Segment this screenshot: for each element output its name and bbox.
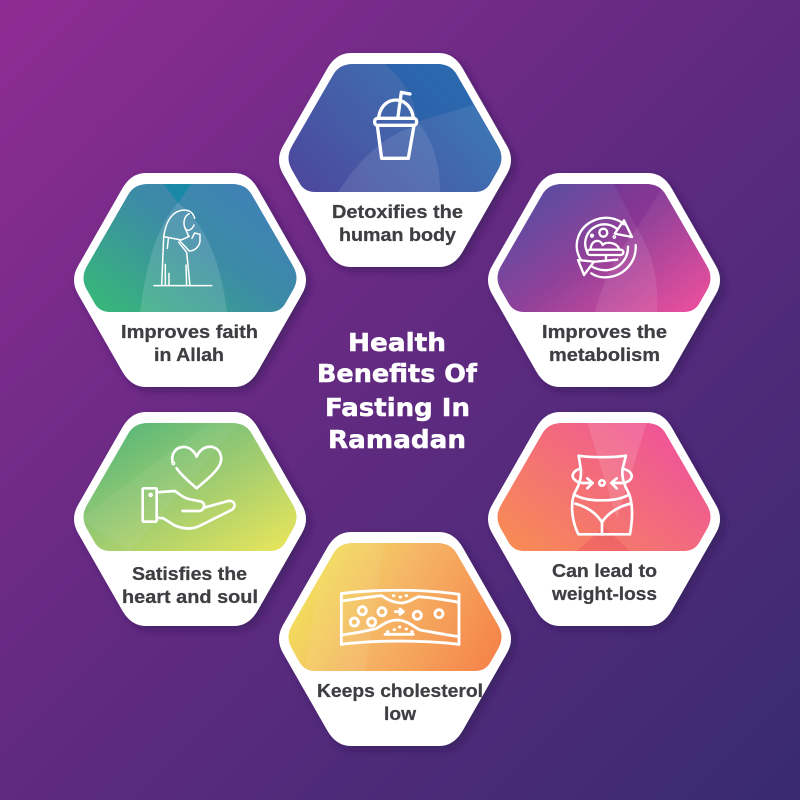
title: Ramadan: [328, 425, 466, 454]
label: metabolism: Improves the: [542, 322, 667, 342]
panel: faith: [74, 173, 306, 387]
hexagon card: metabolism: [488, 173, 720, 387]
label: detoxifies: human body: [339, 225, 456, 245]
icon: metabolism cycle: [577, 218, 636, 277]
panel: cholesterol: [279, 532, 511, 746]
panel: heart and soul: [74, 412, 306, 626]
icon: slim waist: [572, 456, 632, 534]
label: faith: in Allah: [154, 345, 224, 365]
title: Fasting In: [325, 393, 470, 422]
label: metabolism: metabolism: [549, 345, 660, 365]
icon: drink cup: [375, 92, 417, 158]
panel: metabolism: [488, 173, 720, 387]
icon: praying woman: [154, 210, 212, 286]
hexagon card: heart and soul: [74, 412, 306, 626]
label: faith: Improves faith: [121, 322, 258, 342]
hexagon card: cholesterol: [279, 532, 511, 746]
label: heart and soul: Satisfies the: [132, 564, 247, 584]
title: Benefits Of: [317, 359, 478, 388]
panel: weight loss: [488, 412, 720, 626]
hexagon card: detoxifies: [279, 53, 511, 267]
label: cholesterol: low: [384, 704, 417, 724]
icon: artery: [341, 590, 459, 644]
label: heart and soul: heart and soul: [122, 587, 258, 607]
panel: detoxifies: [279, 53, 511, 267]
label: cholesterol: Keeps cholesterol: [317, 681, 483, 701]
label: weight loss: weight-loss: [551, 584, 657, 604]
title: Health: [348, 328, 446, 357]
label: weight loss: Can lead to: [552, 561, 657, 581]
label: detoxifies: Detoxifies the: [332, 202, 463, 222]
hexagon card: faith: [74, 173, 306, 387]
icon: heart in hand: [143, 447, 235, 529]
hexagon card: weight loss: [488, 412, 720, 626]
